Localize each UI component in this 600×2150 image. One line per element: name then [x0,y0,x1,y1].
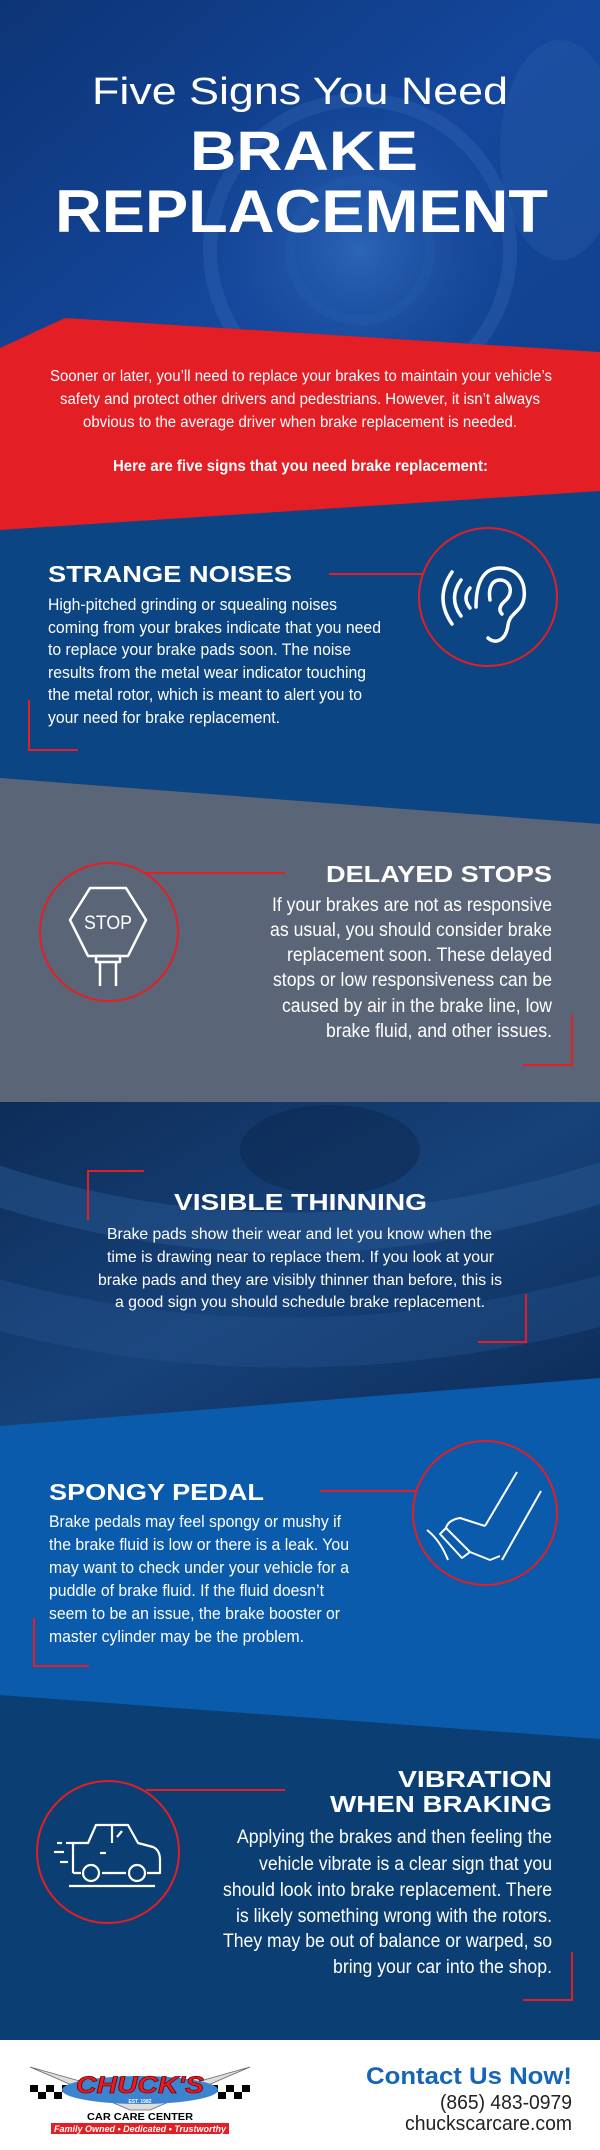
icon: stop sign: STOP [84,913,132,934]
logo: Chuck's Car Care Center: CHUCK'S [76,2072,204,2099]
title [55,71,548,245]
intro text: Sooner or later, you’ll need to replace your brakes to maintain your vehicle’s [50,368,552,385]
text: delayed stops: brake fluid, and other issues. [326,1021,552,1042]
logo: Chuck's Car Care Center: Family Owned • Dedicated • Trustworthy [54,2124,227,2134]
text: spongy pedal [49,1512,349,1646]
text: delayed stops: stops or low responsiveness can be [273,970,552,991]
title: BRAKE [190,119,418,182]
heading: vibration when braking [330,1766,552,1817]
icon: car [37,1781,179,1923]
contact block: chuckscarcare.com [405,2113,572,2135]
heading: delayed stops: DELAYED STOPS [326,861,552,887]
logo: Chuck's Car Care Center: CAR CARE CENTER [87,2112,194,2123]
intro red band [0,318,600,530]
text: delayed stops [270,895,552,1042]
text: vibration: They may be out of balance or warped, so [223,1931,552,1952]
intro text: Here are five signs that you need brake replacement: [113,458,488,475]
text: vibration: should look into brake replacement. There [223,1880,552,1901]
logo: Chuck's Car Care Center: EST. 1982 [128,2099,152,2105]
text: spongy pedal: Brake pedals may feel spongy or mushy if [49,1512,341,1531]
text: vibration [223,1827,552,1978]
text: strange noises: results from the metal wear indicator touching [48,663,366,682]
intro text [50,368,552,475]
panel: delayed stops [40,861,572,1065]
text: strange noises: High-pitched grinding or squealing noises [48,595,337,614]
text: vibration: is likely something wrong with the rotors. [236,1906,552,1927]
text: spongy pedal: master cylinder may be the problem. [49,1627,304,1646]
text: visible thinning: brake pads and they are visibly thinner than before, this is [98,1272,502,1289]
text: strange noises: the metal rotor, which is meant to alert you to [48,685,362,704]
text: strange noises [48,595,381,727]
heading: vibration when braking: VIBRATION [398,1766,552,1792]
heading: visible thinning: VISIBLE THINNING [174,1189,427,1215]
text: strange noises: coming from your brakes indicate that you need [48,618,381,637]
text: delayed stops: caused by air in the brake line, low [282,996,552,1017]
title: Five Signs You Need [92,71,508,113]
text: visible thinning: time is drawing near to replace them. If you look at your [107,1249,495,1266]
contact block [366,2063,572,2135]
text: spongy pedal: seem to be an issue, the brake booster or [49,1604,340,1623]
panel: vibration when braking [37,1766,572,2000]
panel: visible thinning [88,1171,526,1342]
text: visible thinning: a good sign you should schedule brake replacement. [115,1294,485,1311]
text: spongy pedal: may want to check under your vehicle for a [49,1558,349,1577]
contact block: (865) 483-0979 [440,2092,572,2114]
text: vibration: vehicle vibrate is a clear sign that you [259,1854,552,1875]
contact block: Contact Us Now! [366,2063,572,2090]
text: spongy pedal: the brake fluid is low or there is a leak. You [49,1535,349,1554]
icon: stop sign [40,863,178,1001]
heading: spongy pedal: SPONGY PEDAL [49,1479,264,1505]
section backgrounds [0,480,600,2150]
text: spongy pedal: puddle of brake fluid. If the fluid doesn’t [49,1581,324,1600]
logo: Chuck's Car Care Center [30,2067,250,2134]
text: vibration: bring your car into the shop. [333,1957,552,1978]
intro text: obvious to the average driver when brake replacement is needed. [83,414,517,431]
intro text: safety and protect other drivers and pedestrians. However, it isn’t always [60,391,540,408]
text: visible thinning: Brake pads show their wear and let you know when the [107,1226,492,1243]
text: strange noises: to replace your brake pads soon. The noise [48,640,351,659]
heading: vibration when braking: WHEN BRAKING [330,1791,552,1817]
title: REPLACEMENT [55,178,548,245]
panel: spongy pedal [34,1441,557,1666]
text: delayed stops: as usual, you should consider brake [270,920,552,941]
text: delayed stops: If your brakes are not as responsive [272,895,552,916]
heading: strange noises: STRANGE NOISES [48,561,292,587]
text: vibration: Applying the brakes and then feeling the [237,1827,552,1848]
text: delayed stops: replacement soon. These delayed [287,945,552,966]
icon: pedal [413,1441,557,1585]
panel: strange noises [29,528,557,750]
text: visible thinning [98,1226,502,1311]
hero background [0,0,600,500]
icon: ear [419,528,557,666]
text: strange noises: your need for brake replacement. [48,708,280,727]
